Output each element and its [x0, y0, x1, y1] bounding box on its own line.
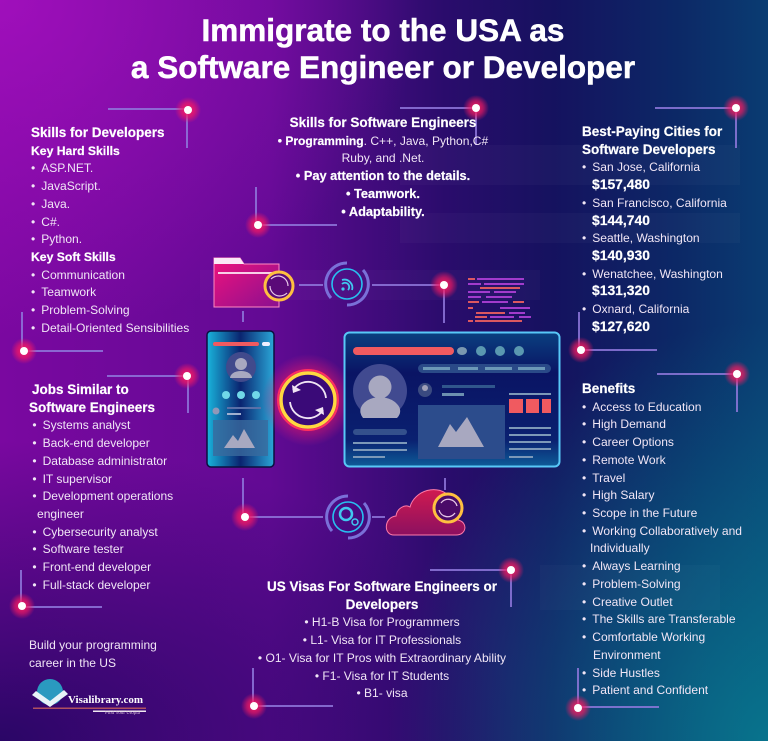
- icon: sync ring: [262, 354, 354, 446]
- text: best-paying cities: • Seattle, Washington: [582, 231, 700, 245]
- text: skills for developers: • Java.: [31, 197, 70, 211]
- text: jobs similar: • Software tester: [32, 542, 124, 556]
- text: us visas: • F1- Visa for IT Students: [315, 669, 449, 683]
- text: jobs similar: • Systems analyst: [32, 418, 130, 432]
- icon: tablet dashboard: [344, 332, 560, 466]
- text: skills for software engineers: Ruby, and .Net.: [342, 151, 424, 165]
- text: skills for developers: Key Hard Skills: [31, 144, 120, 158]
- icon: folder: [214, 258, 293, 307]
- text: skills for software engineers: [278, 115, 488, 219]
- text: skills for developers: Key Soft Skills: [31, 250, 116, 264]
- text: jobs similar: Software Engineers: [29, 400, 155, 415]
- text: jobs similar: • Back-end developer: [32, 436, 150, 450]
- text: benefits: • Problem-Solving: [582, 577, 681, 591]
- text: skills for software engineers: • Programming. C++, Java, Python,C#: [278, 134, 488, 148]
- text: benefits: Environment: [593, 648, 661, 662]
- text: career note: [29, 638, 157, 670]
- icon: wifi badge: [326, 263, 368, 305]
- text: skills for developers: • C#.: [31, 215, 60, 229]
- text: skills for developers: • Detail-Oriented Sensibilities: [31, 321, 189, 335]
- text: best-paying cities: $157,480: [592, 176, 650, 192]
- text: skills for developers: [31, 125, 189, 335]
- text: us visas: Developers: [346, 597, 418, 612]
- text: best-paying cities: $144,740: [592, 212, 650, 228]
- text: benefits: • Access to Education: [582, 400, 701, 414]
- text: benefits: • Comfortable Working: [582, 630, 705, 644]
- icon: cloud: [386, 490, 465, 535]
- title: a Software Engineer or Developer: [131, 49, 635, 85]
- text: skills for developers: • Python.: [31, 232, 82, 246]
- logo: visalibrary: Find Your Utopia: [105, 711, 140, 716]
- text: jobs similar: • Database administrator: [32, 454, 167, 468]
- text: benefits: [582, 381, 742, 697]
- text: skills for software engineers: Skills for Software Engineers: [290, 115, 476, 130]
- icon: phone: [207, 331, 274, 467]
- text: skills for developers: • JavaScript.: [31, 179, 101, 193]
- text: career note: career in the US: [29, 656, 116, 670]
- text: skills for developers: • Problem-Solving: [31, 303, 130, 317]
- text: best-paying cities: Best-Paying Cities for: [582, 124, 722, 139]
- text: benefits: • Remote Work: [582, 453, 666, 467]
- text: jobs similar: • Development operations: [32, 489, 173, 503]
- text: benefits: Benefits: [582, 381, 635, 396]
- text: best-paying cities: $127,620: [592, 318, 650, 334]
- text: jobs similar: • Full-stack developer: [32, 578, 150, 592]
- text: jobs similar: [29, 382, 173, 592]
- text: us visas: [258, 579, 506, 700]
- text: best-paying cities: $131,320: [592, 282, 650, 298]
- text: skills for developers: • Communication: [31, 268, 125, 282]
- text: jobs similar: engineer: [37, 507, 84, 521]
- text: benefits: • Creative Outlet: [582, 595, 673, 609]
- logo: visalibrary: Visalibrary.com: [68, 694, 143, 706]
- text: career note: Build your programming: [29, 638, 157, 652]
- text: skills for software engineers: • Pay attention to the details.: [296, 168, 470, 183]
- text: us visas: • B1- visa: [356, 686, 408, 700]
- text: skills for software engineers: • Teamwork.: [346, 186, 420, 201]
- icon: gear badge: [327, 496, 369, 538]
- title: Immigrate to the USA as: [202, 12, 564, 48]
- text: best-paying cities: [582, 124, 727, 334]
- icon: code snippet: [468, 278, 531, 322]
- text: skills for developers: Skills for Developers: [31, 125, 165, 140]
- text: best-paying cities: • San Francisco, California: [582, 196, 727, 210]
- text: benefits: • High Salary: [582, 488, 655, 502]
- text: best-paying cities: $140,930: [592, 247, 650, 263]
- text: benefits: • High Demand: [582, 417, 666, 431]
- text: skills for software engineers: • Adaptability.: [341, 204, 425, 219]
- text: benefits: • Working Collaboratively and: [582, 524, 742, 538]
- text: jobs similar: • IT supervisor: [32, 472, 112, 486]
- text: best-paying cities: Software Developers: [582, 142, 716, 157]
- title: [131, 12, 635, 85]
- text: skills for developers: • ASP.NET.: [31, 161, 93, 175]
- text: benefits: • Career Options: [582, 435, 674, 449]
- text: benefits: • Travel: [582, 471, 625, 485]
- text: jobs similar: • Front-end developer: [32, 560, 151, 574]
- text: benefits: • The Skills are Transferable: [582, 612, 736, 626]
- text: us visas: • H1-B Visa for Programmers: [304, 615, 460, 629]
- text: benefits: • Always Learning: [582, 559, 681, 573]
- text: jobs similar: Jobs Similar to: [32, 382, 129, 397]
- logo: visalibrary: [32, 679, 146, 716]
- text: skills for developers: • Teamwork: [31, 285, 96, 299]
- text: benefits: • Side Hustles: [582, 666, 660, 680]
- text: best-paying cities: • Oxnard, California: [582, 302, 689, 316]
- text: best-paying cities: • San Jose, California: [582, 160, 700, 174]
- text: best-paying cities: • Wenatchee, Washington: [582, 267, 723, 281]
- text: us visas: • L1- Visa for IT Professionals: [303, 633, 461, 647]
- text: us visas: • O1- Visa for IT Pros with Extraordinary Ability: [258, 651, 506, 665]
- text: benefits: • Scope in the Future: [582, 506, 697, 520]
- text: benefits: • Patient and Confident: [582, 683, 708, 697]
- text: jobs similar: • Cybersecurity analyst: [32, 525, 158, 539]
- text: benefits: Individually: [590, 541, 650, 555]
- text: us visas: US Visas For Software Engineers or: [267, 579, 497, 594]
